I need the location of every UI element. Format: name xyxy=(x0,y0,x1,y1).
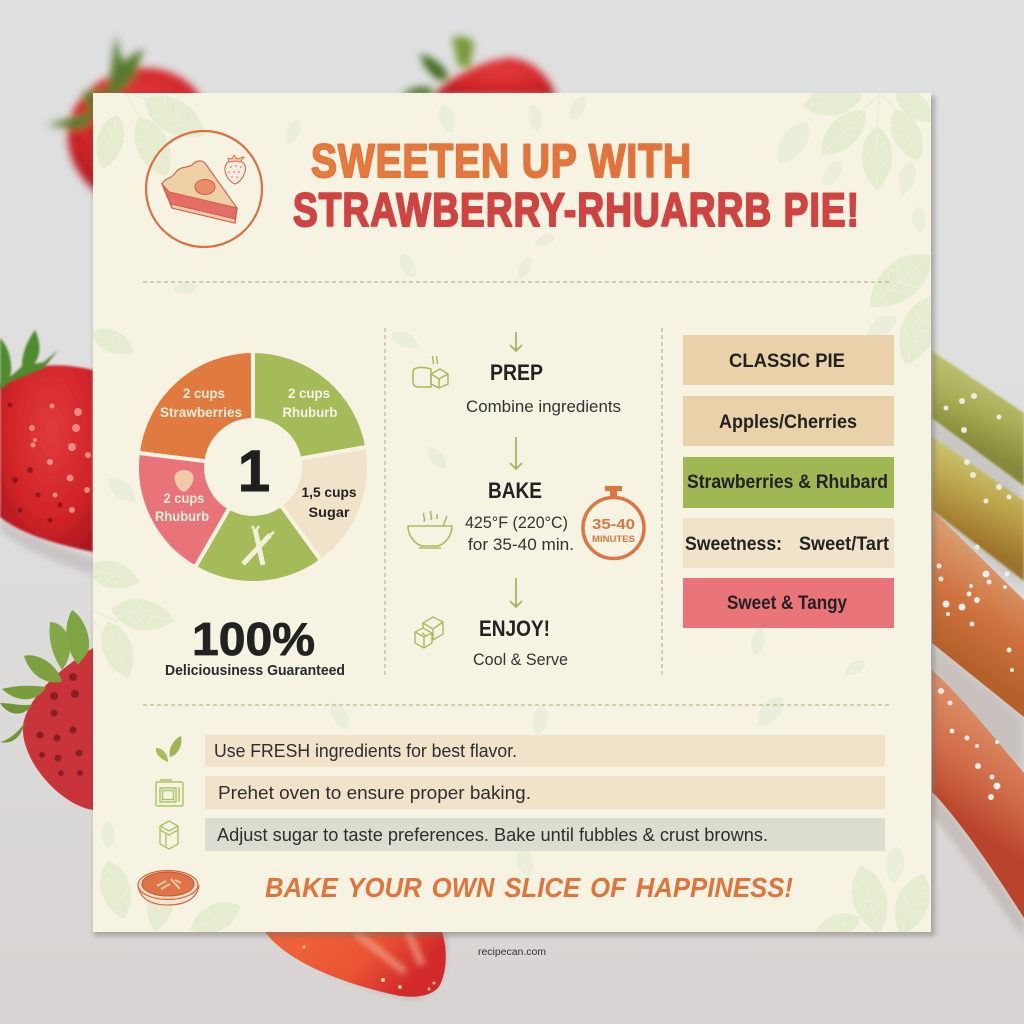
stat: 100% deliciousness xyxy=(165,613,345,679)
text: bake: for 35-40 min. xyxy=(468,535,574,554)
segment: strawberries: 2 cups xyxy=(183,385,225,401)
text: bake: BAKE xyxy=(488,478,542,503)
text: enjoy xyxy=(473,616,568,669)
dashed dividers xyxy=(143,282,890,705)
photo: top-centre strawberry xyxy=(404,36,556,96)
segment: sugar xyxy=(281,447,369,561)
text: prep: Combine ingredients xyxy=(466,397,621,416)
segment: rhubarb green: Rhuburb xyxy=(282,404,338,420)
icon: timer 35-40 minutes: MINUTES xyxy=(592,534,635,545)
icon: whole pie xyxy=(138,870,199,905)
title: SWEETEN UP WITH xyxy=(311,135,691,188)
panel: baking steps xyxy=(408,332,644,669)
segment: sugar: Sugar xyxy=(308,504,350,520)
row: apples/cherries: Apples/Cherries xyxy=(719,412,857,433)
segment: pink rhubarb: 2 cups xyxy=(164,490,205,506)
icon: pot and cube xyxy=(413,356,448,388)
segment: pink rhubarb: Rhuburb xyxy=(155,508,209,524)
row: classic pie xyxy=(683,335,894,385)
icon: sugar cubes xyxy=(415,617,443,648)
row: sweetness: Sweet/Tart xyxy=(799,534,890,555)
segment: strawberries xyxy=(138,351,253,461)
panel: main poster xyxy=(83,81,947,947)
text: prep: PREP xyxy=(490,360,543,385)
tip: preheat oven xyxy=(205,776,885,809)
tip: preheat oven: Prehet oven to ensure proper baking. xyxy=(218,782,531,803)
photo: left strawberry xyxy=(0,330,93,575)
row: sweet and tangy xyxy=(683,578,894,628)
background leaves xyxy=(83,81,947,947)
segment: sugar: 1,5 cups xyxy=(302,484,357,500)
panel: pie chart of ingredients xyxy=(137,351,369,583)
segment: rhubarb green xyxy=(253,351,367,459)
arrow: into enjoy xyxy=(510,578,522,607)
text: enjoy: ENJOY! xyxy=(479,616,550,641)
text: prep xyxy=(466,360,621,416)
source credit: recipecan.com xyxy=(478,947,546,958)
photo: top-left strawberry xyxy=(47,34,200,195)
segment: strawberries: Strawberries xyxy=(160,404,242,420)
text: enjoy: Cool & Serve xyxy=(473,650,568,669)
centre number: 1 xyxy=(238,439,270,504)
icon: timer 35-40 minutes: 35-40 xyxy=(592,516,635,533)
tip: fresh ingredients: Use FRESH ingredients for best flavor. xyxy=(214,740,517,761)
icon: sugar jar xyxy=(160,821,178,849)
segment: rhubarb icon xyxy=(195,505,321,583)
text: bake xyxy=(465,478,574,554)
arrow: into bake xyxy=(510,437,522,469)
tip: adjust sugar xyxy=(205,818,885,851)
row: classic pie: CLASSIC PIE xyxy=(729,351,845,372)
row: strawberries and rhubard xyxy=(683,457,894,508)
icon: timer 35-40 minutes xyxy=(583,486,644,558)
panel: tips xyxy=(156,735,885,851)
icon: pie slice and strawberry badge xyxy=(146,131,262,247)
panel shadow xyxy=(94,96,935,936)
photo: bottom strawberry xyxy=(265,930,447,999)
icon: leaves xyxy=(156,736,181,762)
tip: adjust sugar: Adjust sugar to taste preferences. Bake until fubbles & crust browns. xyxy=(217,824,768,845)
row: sweet and tangy: Sweet & Tangy xyxy=(727,593,847,614)
photo: rhubarb stalks xyxy=(932,351,1024,940)
text: bake: 425°F (220°C) xyxy=(465,513,568,532)
icon: oven xyxy=(156,780,183,806)
panel: comparison column xyxy=(683,335,894,628)
row: sweetness: Sweetness: xyxy=(685,534,782,555)
segment: pink rhubarb xyxy=(137,453,230,568)
row: apples/cherries xyxy=(683,396,894,446)
title: STRAWBERRY-RHUARRB PIE! xyxy=(293,185,859,237)
row: sweetness xyxy=(683,518,894,568)
icon: steaming bowl xyxy=(408,511,452,548)
arrow: into prep xyxy=(510,332,522,351)
tip: fresh ingredients xyxy=(205,735,885,767)
stat: 100% deliciousness: Deliciousiness Guaranteed xyxy=(165,662,345,679)
title xyxy=(293,135,859,237)
row: strawberries and rhubard: Strawberries & Rhubard xyxy=(687,472,888,493)
segment: rhubarb green: 2 cups xyxy=(288,385,330,401)
stat: 100% deliciousness: 100% xyxy=(192,613,315,665)
closing tagline: BAKE YOUR OWN SLICE OF HAPPINESS! xyxy=(265,872,793,903)
photo: lower-left strawberry xyxy=(0,610,93,810)
